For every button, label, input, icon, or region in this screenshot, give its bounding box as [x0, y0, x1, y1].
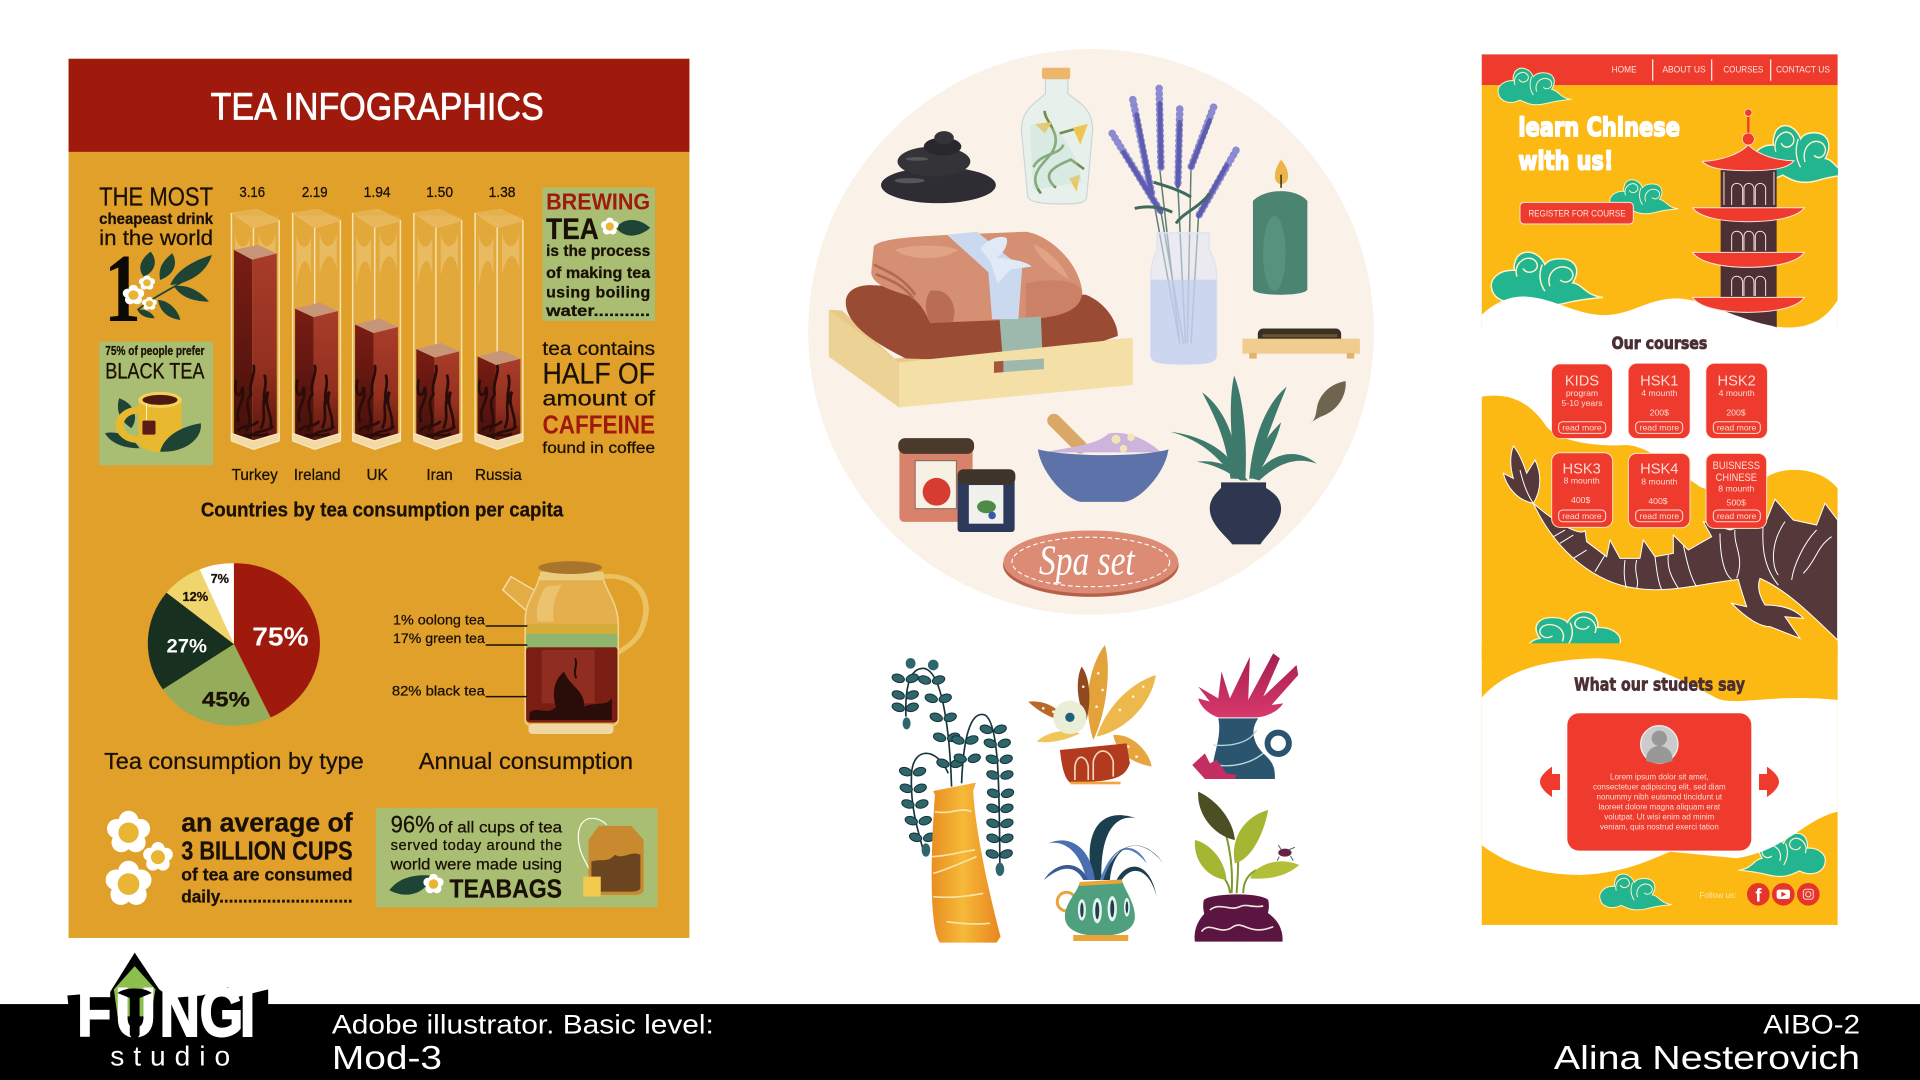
card: HSK1: HSK1	[1640, 373, 1678, 389]
icon: cloud	[1491, 252, 1603, 305]
card: testimonial: consectetuer adipiscing elit, sed diam	[1593, 782, 1726, 791]
chart: teapot annual consumption: 17% green tea	[393, 630, 485, 646]
illustration: dragon	[1503, 446, 1838, 640]
chart caption: countries by tea consumption: Countries by tea consumption per capita	[201, 500, 564, 522]
card: KIDS: program	[1566, 388, 1598, 398]
navigation bar: COURSES	[1723, 64, 1763, 74]
icon: cloud	[1610, 180, 1678, 214]
bar: Ireland 2.19: 2.19	[302, 185, 328, 201]
panel: teabags callout: of all cups of tea	[438, 820, 563, 837]
text: follow us: Follow us:	[1699, 890, 1737, 900]
pie chart: tea consumption by type: 27%	[167, 636, 207, 658]
panel: brewing tea callout: is the process	[546, 243, 650, 260]
chart: teapot annual consumption: 82% black tea	[392, 683, 485, 699]
card: HSK2: HSK2	[1717, 373, 1756, 389]
bar: Ireland 2.19	[293, 185, 341, 484]
plant: spider plant in green jug	[1044, 815, 1163, 941]
panel: brewing tea callout	[542, 187, 655, 321]
arrow: previous	[1540, 767, 1560, 797]
bar: Russia 1.38	[475, 185, 523, 484]
pie chart: tea consumption by type: 7%	[211, 571, 230, 586]
icon: dried leaf	[1309, 381, 1346, 423]
icon: facebook	[1747, 883, 1770, 906]
card: HSK3: 400$	[1571, 495, 1590, 505]
text: the most cheapeast drink	[99, 184, 213, 250]
bar: Turkey 3.16: 3.16	[239, 185, 265, 201]
icon: cloud	[1498, 68, 1572, 105]
card: testimonial: nonummy nibh euismod tincidunt ut	[1597, 792, 1723, 801]
hero heading: with us!	[1518, 146, 1613, 176]
navigation bar: HOME	[1612, 64, 1637, 74]
text: the most cheapeast drink: in the world	[99, 227, 213, 250]
icon: number one with tea branch: 1	[104, 235, 141, 343]
bar: UK 1.94: 1.94	[364, 185, 391, 201]
panel: black tea callout	[99, 342, 213, 465]
heading: tea consumption by type: Tea consumption by type	[104, 748, 364, 774]
text: half of amount of caffeine: CAFFEINE	[542, 411, 655, 439]
course cards	[1552, 363, 1767, 528]
text: three billion cups: 3 BILLION CUPS	[181, 838, 353, 866]
card: business chinese: read more	[1717, 511, 1757, 521]
text: half of amount of caffeine	[542, 338, 655, 457]
hero yellow background	[1482, 85, 1838, 328]
panel: tea infographics	[69, 59, 689, 938]
card: KIDS	[1552, 364, 1612, 438]
text: author: Alina Nesterovich	[1554, 1040, 1860, 1077]
panel: teabags callout: served today around the	[391, 838, 562, 854]
card: HSK3: 8 mounth	[1564, 476, 1600, 486]
panel: black tea callout: BLACK TEA	[105, 358, 205, 383]
icon: instagram	[1797, 883, 1820, 906]
card: KIDS: 5-10 years	[1562, 398, 1603, 408]
chart: teapot annual consumption	[392, 561, 646, 734]
text: course title	[332, 1009, 714, 1077]
illustrations: potted plants	[891, 645, 1299, 943]
icon: herbal bottle	[1021, 68, 1093, 204]
card: KIDS: KIDS	[1565, 373, 1599, 389]
navigation bar: CONTACT US	[1776, 64, 1830, 74]
text: course title: Adobe illustrator. Basic level:	[332, 1009, 714, 1039]
bar: Turkey 3.16	[231, 185, 279, 484]
button: register for course	[1520, 202, 1633, 224]
card: testimonial: veniam, quis nostrud exerci tation	[1600, 822, 1719, 831]
panel: spa set circle	[808, 49, 1374, 615]
heading: annual consumption: Annual consumption	[419, 748, 633, 774]
text: three billion cups: of tea are consumed	[181, 864, 353, 884]
panel: brewing tea callout: water...........	[545, 303, 650, 320]
card: testimonial: volutpat. Ut wisi enim ad minim	[1604, 812, 1715, 821]
card: testimonial: Lorem ipsum dolor sit amet,	[1610, 772, 1709, 781]
card: HSK2: 4 mounth	[1719, 388, 1755, 398]
pie chart: tea consumption by type: 75%	[252, 623, 309, 651]
icon: mortar with bath salt	[1038, 420, 1168, 502]
heading: what our students say: What our studets say	[1574, 676, 1745, 696]
button: register for course: REGISTER FOR COURSE	[1528, 209, 1626, 219]
text: half of amount of caffeine: found in coffee	[542, 440, 655, 457]
panel: learn chinese web page	[1482, 54, 1852, 925]
card: HSK4: read more	[1640, 511, 1679, 521]
card: HSK1: read more	[1640, 423, 1679, 433]
hero heading	[1518, 116, 1680, 171]
lower page section: courses background and dragon	[1482, 396, 1838, 660]
icon: yellow mug	[105, 392, 201, 452]
card: HSK1: 4 mounth	[1641, 388, 1678, 398]
icon: facebook: f	[1755, 885, 1762, 906]
panel: teabags callout	[376, 808, 658, 907]
text: the most cheapeast drink: cheapeast drink	[99, 211, 213, 228]
navigation bar	[1482, 54, 1838, 85]
card: HSK2	[1706, 363, 1767, 438]
card: HSK4: 8 mounth	[1641, 476, 1678, 486]
card: business chinese: 500$	[1727, 498, 1746, 508]
text: half of amount of caffeine: amount of	[542, 386, 655, 410]
icon: teabag	[578, 818, 644, 897]
card: HSK3	[1552, 453, 1613, 527]
lower page section: testimonial background	[1482, 643, 1838, 925]
card: business chinese	[1706, 453, 1767, 528]
card: HSK4	[1628, 453, 1690, 528]
icon: lavender in glass jar	[1112, 88, 1236, 364]
text: three billion cups: daily............................	[181, 886, 353, 906]
card: testimonial	[1567, 713, 1751, 851]
card: HSK1: 200$	[1650, 408, 1669, 418]
label: spa set	[1003, 530, 1179, 597]
label: spa set: Spa set	[1039, 538, 1136, 584]
icon: tea flowers	[106, 811, 173, 905]
icon: soap on wooden tray	[1242, 329, 1360, 359]
icon: cloud	[1600, 874, 1672, 910]
card: business chinese: 8 mounth	[1718, 484, 1755, 494]
bar chart: countries by tea consumption	[231, 185, 523, 484]
icon: cloud	[1738, 833, 1825, 877]
card: HSK3: HSK3	[1563, 461, 1601, 477]
logo: fungi studio: studio	[110, 1040, 230, 1071]
icon: youtube	[1772, 883, 1795, 906]
illustration: pagoda	[1693, 109, 1804, 328]
text: author	[1554, 1009, 1860, 1077]
bar: Turkey 3.16: Turkey	[232, 467, 278, 484]
web hero section	[1482, 54, 1852, 364]
pie chart: tea consumption by type	[148, 563, 320, 726]
card: business chinese: CHINESE	[1716, 472, 1757, 484]
icon: scented candle jars	[898, 438, 1015, 532]
logo: fungi studio	[67, 953, 268, 1071]
panel: brewing tea callout: BREWING	[546, 188, 650, 214]
panel: teabags callout: world were made using	[390, 856, 562, 873]
text: three billion cups: an average of	[181, 807, 354, 837]
text: author: AIBO-2	[1763, 1009, 1860, 1039]
card: HSK3: read more	[1562, 511, 1602, 521]
hero heading: learn Chinese	[1518, 113, 1680, 143]
chart: teapot annual consumption: 1% oolong tea	[393, 611, 485, 627]
icon: number one with tea branch	[104, 235, 212, 343]
icon: towels in wooden tray	[829, 232, 1133, 407]
card: HSK2: read more	[1717, 423, 1757, 433]
plant: spotted leaves in red pot	[1028, 645, 1156, 784]
panel: teabags callout: TEABAGS	[449, 876, 562, 904]
panel: brewing tea callout: using boiling	[546, 285, 650, 302]
text: half of amount of caffeine: tea contains	[542, 338, 655, 360]
panel: brewing tea callout: TEA	[546, 213, 599, 246]
footer bar	[0, 1004, 1920, 1080]
arrow: next	[1759, 767, 1779, 797]
text: three billion cups	[181, 807, 354, 906]
card: HSK4: 400$	[1648, 496, 1668, 506]
bar: Iran 1.50: 1.50	[426, 185, 453, 201]
title banner: TEA INFOGRAPHICS	[211, 86, 544, 128]
title banner	[69, 59, 689, 152]
card: HSK1	[1628, 363, 1690, 438]
bar: UK 1.94	[353, 185, 400, 484]
panel: teabags callout: 96%	[391, 812, 435, 839]
bar: Ireland 2.19: Ireland	[294, 467, 341, 484]
card: KIDS: read more	[1562, 423, 1602, 433]
bar: Russia 1.38: Russia	[475, 467, 522, 484]
card: HSK2: 200$	[1726, 408, 1746, 418]
panel: brewing tea callout: of making tea	[546, 265, 650, 282]
panel: black tea callout: 75% of people prefer	[105, 343, 204, 358]
text: course title: Mod-3	[332, 1040, 442, 1077]
card: testimonial: laoreet dolore magna aliquam erat	[1599, 802, 1721, 811]
icon: aloe in dark pot	[1170, 375, 1317, 544]
text: half of amount of caffeine: HALF OF	[542, 357, 655, 390]
pie chart: tea consumption by type: 45%	[202, 689, 250, 712]
card: business chinese: BUISNESS	[1713, 460, 1760, 472]
icon: cloud	[1756, 124, 1838, 184]
plant: coral in blue jug	[1192, 653, 1298, 779]
text: the most cheapeast drink: THE MOST	[99, 184, 213, 212]
pagoda base	[1693, 297, 1804, 327]
bar: Iran 1.50: Iran	[426, 467, 453, 484]
plant: vine in orange vase	[891, 658, 1015, 943]
icon: cloud	[1528, 611, 1622, 644]
logo: fungi studio: FUNGI	[77, 975, 255, 1051]
bar: UK 1.94: UK	[367, 467, 389, 484]
heading: our courses: Our courses	[1612, 334, 1707, 353]
white wave divider	[1482, 296, 1838, 328]
icon: massage stones	[881, 131, 996, 203]
bar: Russia 1.38: 1.38	[489, 185, 516, 201]
navigation bar: ABOUT US	[1662, 64, 1706, 74]
icon: avatar	[1641, 726, 1678, 763]
plant: banana leaves in purple pot	[1195, 792, 1299, 942]
card: HSK4: HSK4	[1640, 461, 1678, 477]
bar: Iran 1.50	[414, 185, 462, 484]
pie chart: tea consumption by type: 12%	[182, 589, 209, 604]
icon: green candle	[1253, 160, 1307, 295]
